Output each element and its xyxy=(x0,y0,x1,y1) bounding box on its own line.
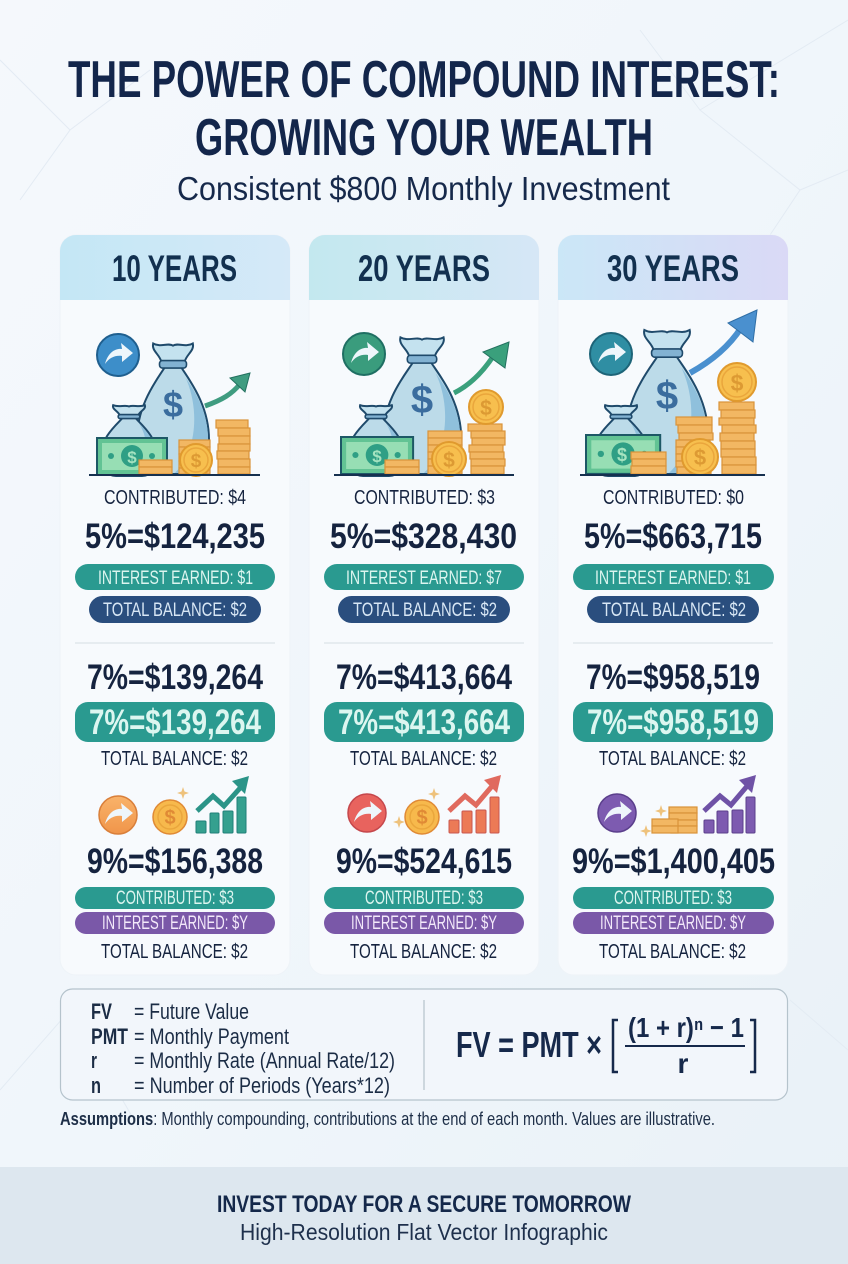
pill: total balance xyxy=(89,596,261,623)
icon row: arrow, coin, bar chart: $ xyxy=(416,807,428,829)
icon row: arrow, coin, bar chart xyxy=(99,776,249,834)
pill: total balance xyxy=(338,596,510,623)
legend: variable definitions: = Monthly Payment xyxy=(134,1024,289,1049)
title: GROWING YOUR WEALTH xyxy=(195,109,653,167)
pill: interest earned: INTEREST EARNED: $7 xyxy=(346,567,502,589)
formula xyxy=(456,1012,755,1079)
panel header: 10 years xyxy=(60,235,290,300)
icon: money bags, coins and growth arrow: $ xyxy=(163,384,183,425)
icon: money bags, coins and growth arrow xyxy=(580,310,765,476)
assumptions note: Assumptions: Monthly compounding, contributions at the end of each month. Values are illustrative. xyxy=(60,1109,715,1129)
legend: variable definitions: = Number of Periods (Years*12) xyxy=(134,1073,390,1098)
pill: interest earned xyxy=(75,564,275,590)
icon: money bags, coins and growth arrow: $ xyxy=(656,374,678,418)
label: total balance: TOTAL BALANCE: $2 xyxy=(350,941,497,963)
icon: money bags, coins and growth arrow: $ xyxy=(372,447,382,466)
formula: (1 + r)ⁿ − 1 xyxy=(628,1012,744,1043)
icon: money bags, coins and growth arrow: $ xyxy=(411,378,433,422)
panel: 10 years xyxy=(60,235,290,975)
legend: variable definitions: = Future Value xyxy=(134,999,249,1024)
value: 7%: 7%=$958,519 xyxy=(586,658,760,697)
pill: interest earned: INTEREST EARNED: $Y xyxy=(351,912,497,934)
title xyxy=(68,51,780,167)
pill: 7% highlight: 7%=$958,519 xyxy=(587,703,759,742)
pill: contributed: CONTRIBUTED: $3 xyxy=(365,887,483,909)
value: 7%: 7%=$139,264 xyxy=(87,658,263,697)
icon: money bags, coins and growth arrow: $ xyxy=(694,445,706,470)
icon: money bags, coins and growth arrow: $ xyxy=(617,445,627,465)
pill: 7% highlight: 7%=$139,264 xyxy=(89,703,261,742)
icon: money bags, coins and growth arrow: $ xyxy=(480,397,492,420)
pill: total balance: TOTAL BALANCE: $2 xyxy=(103,599,247,621)
legend: variable definitions: = Monthly Rate (Annual Rate/12) xyxy=(134,1048,395,1073)
label: total balance: TOTAL BALANCE: $2 xyxy=(350,748,497,770)
pill: interest earned: INTEREST EARNED: $1 xyxy=(595,567,751,589)
legend: variable definitions: n xyxy=(91,1073,101,1098)
value: 9%: 9%=$1,400,405 xyxy=(572,842,775,881)
pill: interest earned: INTEREST EARNED: $Y xyxy=(102,912,248,934)
label: contributed: CONTRIBUTED: $0 xyxy=(603,487,744,509)
panel header: 20 years xyxy=(309,235,539,300)
footer band xyxy=(0,1167,848,1264)
panel: 30 years xyxy=(558,235,788,975)
icon: money bags, coins and growth arrow: $ xyxy=(127,448,137,467)
icon row: arrow, coins, bar chart xyxy=(598,775,756,837)
legend: variable definitions: FV xyxy=(91,999,112,1024)
icon row: arrow, coin, bar chart: $ xyxy=(164,807,176,829)
icon: money bags, coins and growth arrow: $ xyxy=(443,449,455,472)
pill: interest earned xyxy=(573,564,774,590)
pill: total balance: TOTAL BALANCE: $2 xyxy=(353,599,497,621)
value: 5%: 5%=$124,235 xyxy=(85,517,265,556)
panel header: 10 years: 10 YEARS xyxy=(112,248,237,289)
pill: interest earned: INTEREST EARNED: $1 xyxy=(98,567,253,589)
value: 5%: 5%=$328,430 xyxy=(330,517,517,556)
label: total balance: TOTAL BALANCE: $2 xyxy=(599,941,746,963)
pill: 7% highlight: 7%=$413,664 xyxy=(338,703,510,742)
label: total balance: TOTAL BALANCE: $2 xyxy=(599,748,746,770)
pill: contributed: CONTRIBUTED: $3 xyxy=(614,887,732,909)
value: 9%: 9%=$524,615 xyxy=(336,842,512,881)
label: total balance: TOTAL BALANCE: $2 xyxy=(101,748,248,770)
icon row: arrow, coin, bar chart xyxy=(348,775,501,834)
value: 7%: 7%=$413,664 xyxy=(336,658,512,697)
pill: contributed: CONTRIBUTED: $3 xyxy=(116,887,234,909)
panel header: 30 years: 30 YEARS xyxy=(607,248,739,289)
pill: interest earned xyxy=(324,564,524,590)
label: total balance: TOTAL BALANCE: $2 xyxy=(101,941,248,963)
footer headline: INVEST TODAY FOR A SECURE TOMORROW xyxy=(217,1191,631,1218)
value: 9%: 9%=$156,388 xyxy=(87,842,263,881)
icon: money bags, coins and growth arrow: $ xyxy=(191,451,202,472)
panel header: 30 years xyxy=(558,235,788,300)
formula: r xyxy=(678,1048,689,1079)
pill: total balance: TOTAL BALANCE: $2 xyxy=(602,599,746,621)
subtitle: Consistent $800 Monthly Investment xyxy=(177,170,670,207)
panel header: 20 years: 20 YEARS xyxy=(358,248,490,289)
label: contributed: CONTRIBUTED: $4 xyxy=(104,487,246,509)
pill: total balance xyxy=(587,596,759,623)
panel: formula xyxy=(60,989,788,1100)
formula: FV = PMT × xyxy=(456,1024,602,1065)
icon: money bags, coins and growth arrow xyxy=(89,334,260,476)
value: 5%: 5%=$663,715 xyxy=(584,517,762,556)
panel: 20 years xyxy=(309,235,539,975)
label: contributed: CONTRIBUTED: $3 xyxy=(354,487,495,509)
pill: interest earned: INTEREST EARNED: $Y xyxy=(600,912,746,934)
icon: money bags, coins and growth arrow xyxy=(334,333,514,476)
legend: variable definitions: PMT xyxy=(91,1024,128,1049)
legend: variable definitions: r xyxy=(91,1048,97,1073)
footer subline: High-Resolution Flat Vector Infographic xyxy=(240,1219,608,1245)
legend: variable definitions xyxy=(91,999,395,1098)
icon: money bags, coins and growth arrow: $ xyxy=(731,370,744,396)
